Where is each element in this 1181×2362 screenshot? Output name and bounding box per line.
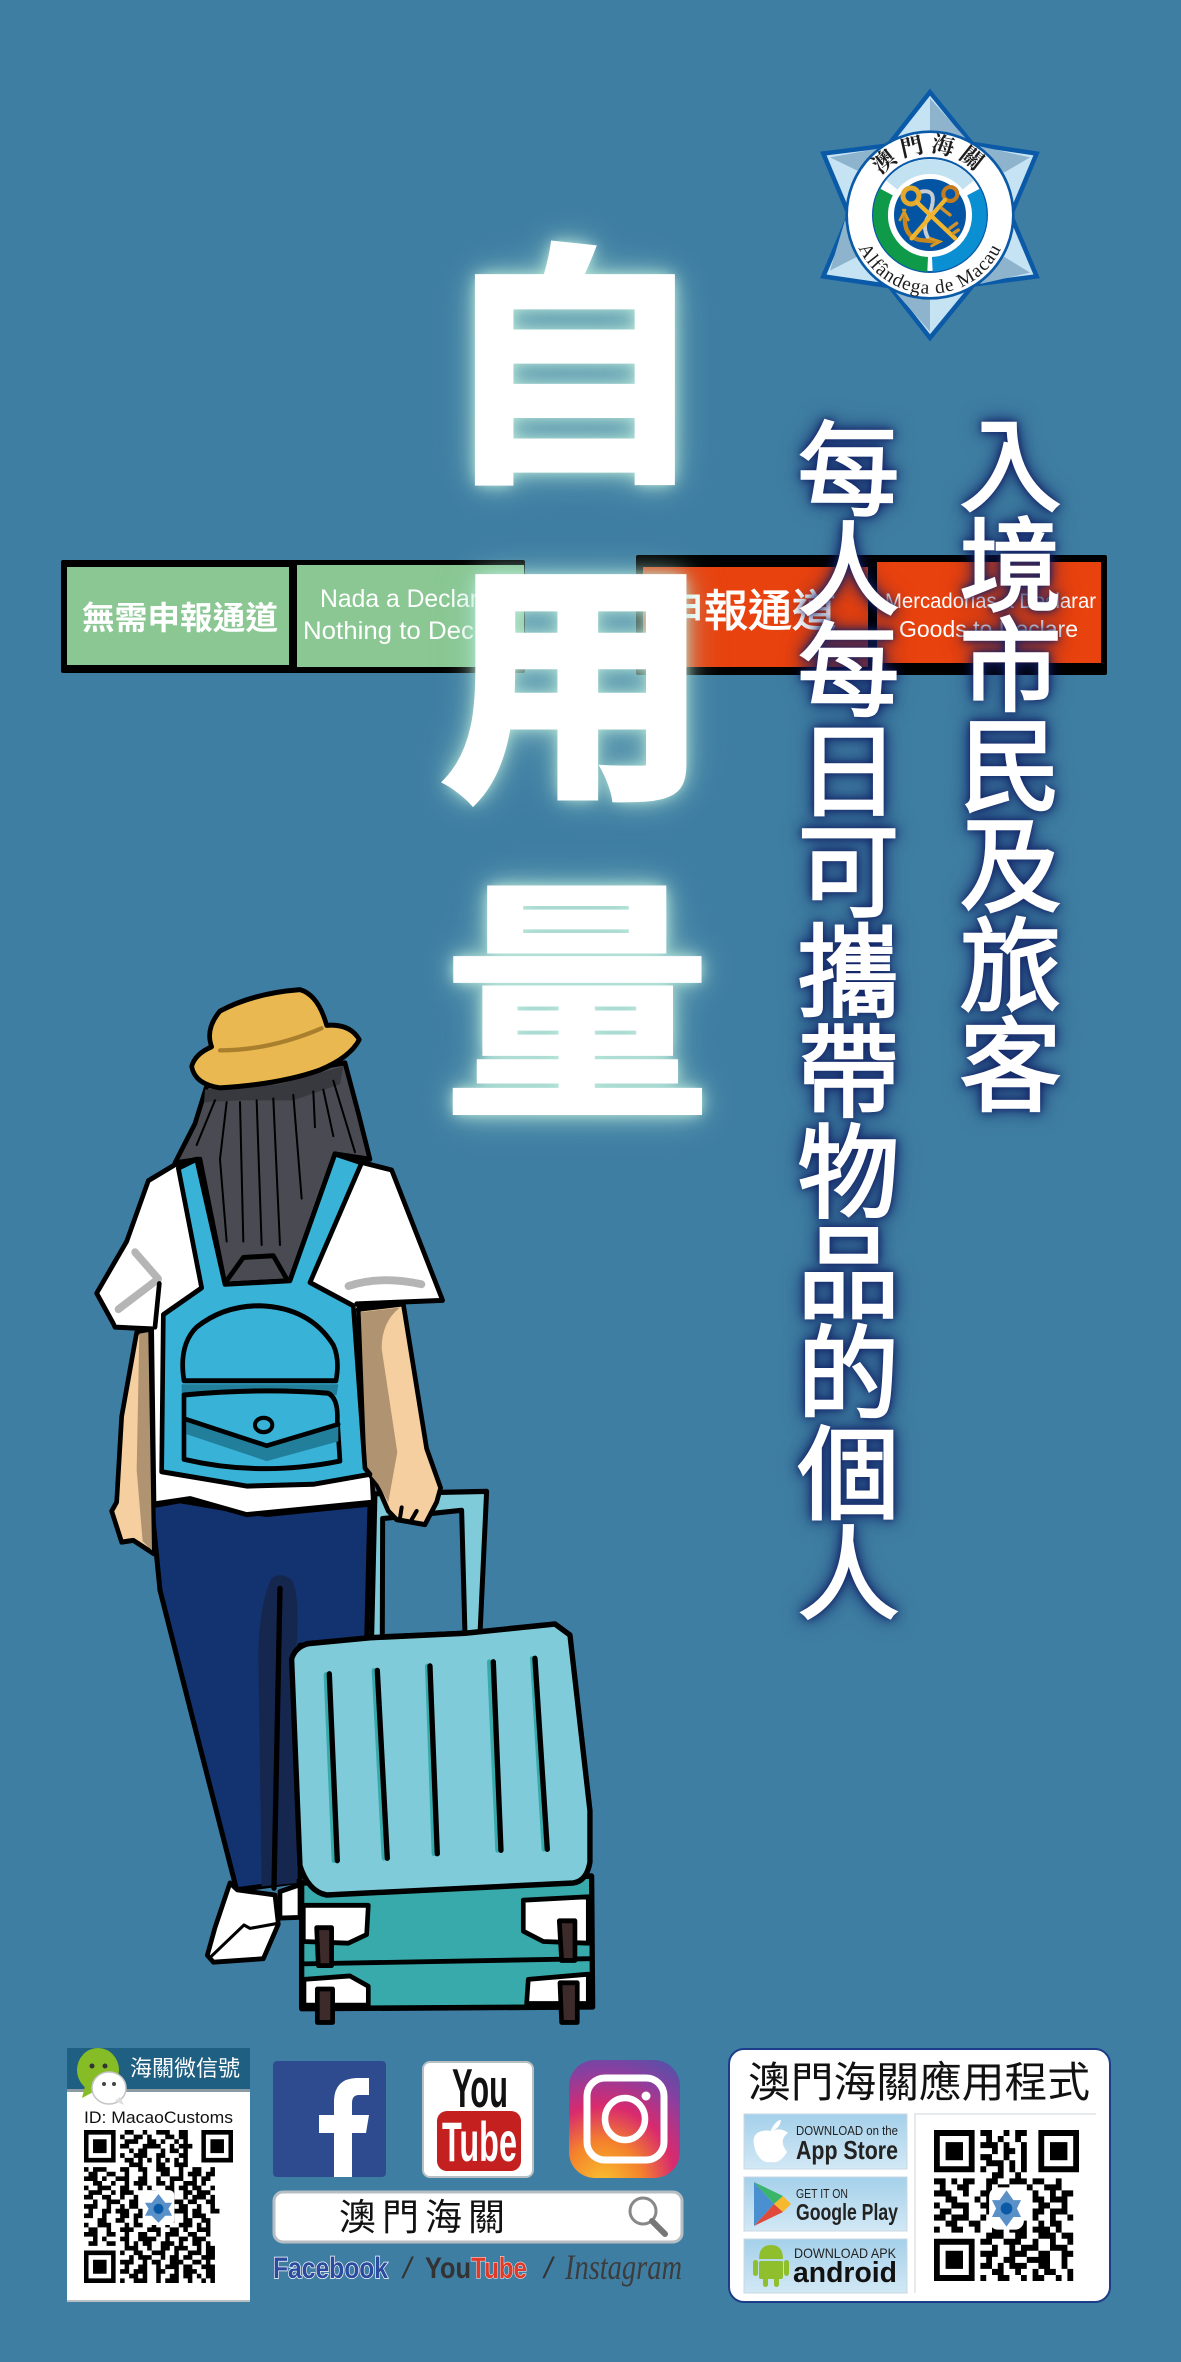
card title: 澳門海關應用程式 xyxy=(748,2059,1090,2106)
button: google play xyxy=(744,2177,907,2231)
lane sign: goods to declare xyxy=(636,555,1107,675)
title: 用: 用 xyxy=(442,547,708,831)
vertical text: 入境市民及旅客: 入境市民及旅客 xyxy=(945,413,1059,1113)
sign text: Mercadorias a Declarar: Mercadorias a Declarar xyxy=(885,590,1096,613)
logo chinese name: 澳門海關 xyxy=(870,132,986,174)
social labels: Tube xyxy=(471,2252,527,2285)
right arm and hand xyxy=(358,1304,441,1525)
button: google play: GET IT ON xyxy=(796,2186,848,2201)
icon: youtube: Tube xyxy=(442,2110,517,2173)
button: app store: App Store xyxy=(796,2135,898,2165)
backpack xyxy=(162,1154,370,1486)
pants xyxy=(152,1501,370,1962)
icon: android xyxy=(753,2245,789,2287)
icon: youtube: You xyxy=(452,2057,508,2119)
lane sign: nothing to declare xyxy=(61,560,525,673)
sign text: no declaration channel: 無需申報通道 xyxy=(82,600,278,636)
suitcase xyxy=(292,1491,593,2022)
shoes xyxy=(207,1883,300,1962)
icon: youtube xyxy=(423,2057,533,2177)
app qr code panel xyxy=(915,2114,1096,2293)
social labels: You xyxy=(425,2252,471,2285)
button: app store: DOWNLOAD on the xyxy=(796,2123,898,2138)
hair xyxy=(175,1063,370,1284)
wechat title: 海關微信號 xyxy=(130,2056,240,2081)
icon: facebook xyxy=(273,2061,386,2177)
icon: play triangle xyxy=(754,2182,791,2226)
logo portuguese name: Alfândega de Macau xyxy=(858,246,1001,296)
wechat card xyxy=(67,2048,250,2302)
search text: 澳門海關 xyxy=(339,2197,511,2238)
wechat id: ID: MacaoCustoms xyxy=(84,2108,233,2127)
sign text: Nothing to Declare: Nothing to Declare xyxy=(303,617,517,645)
shirt xyxy=(97,1154,443,1554)
logo emblem: anchor and crossed keys xyxy=(900,187,958,246)
left arm xyxy=(112,1331,154,1554)
button: google play: Google Play xyxy=(796,2199,898,2225)
title: 自: 自 xyxy=(440,230,706,514)
customs logo xyxy=(820,88,1040,342)
social labels: / xyxy=(542,2252,555,2285)
button: android: DOWNLOAD APK xyxy=(794,2245,897,2261)
social labels: / xyxy=(401,2252,414,2285)
social labels: Instagram xyxy=(564,2247,682,2287)
title: 量: 量 xyxy=(444,866,710,1150)
icon: magnifier xyxy=(630,2198,665,2234)
hat xyxy=(192,990,359,1088)
search bar xyxy=(274,2192,682,2242)
sign text: Goods to Declare: Goods to Declare xyxy=(899,616,1078,642)
social labels xyxy=(273,2247,682,2287)
icon: apple xyxy=(754,2120,788,2162)
button: app store xyxy=(744,2114,907,2169)
suitcase wheels xyxy=(317,1921,577,2022)
sign text: declaration channel: 申報通道 xyxy=(660,587,836,636)
sign text: Nada a Declarar: Nada a Declarar xyxy=(320,585,500,613)
social labels: Facebook xyxy=(273,2252,388,2285)
button: android xyxy=(744,2239,907,2293)
app download card xyxy=(729,2049,1110,2302)
button: android: android xyxy=(793,2257,897,2289)
icon: instagram xyxy=(569,2060,680,2178)
traveller illustration xyxy=(97,990,593,2022)
wechat qr code xyxy=(84,2130,233,2283)
icon: wechat bubbles xyxy=(77,2048,126,2105)
vertical text: 每人每日可攜帶物品的個人: 每人每日可攜帶物品的個人 xyxy=(783,417,897,1622)
